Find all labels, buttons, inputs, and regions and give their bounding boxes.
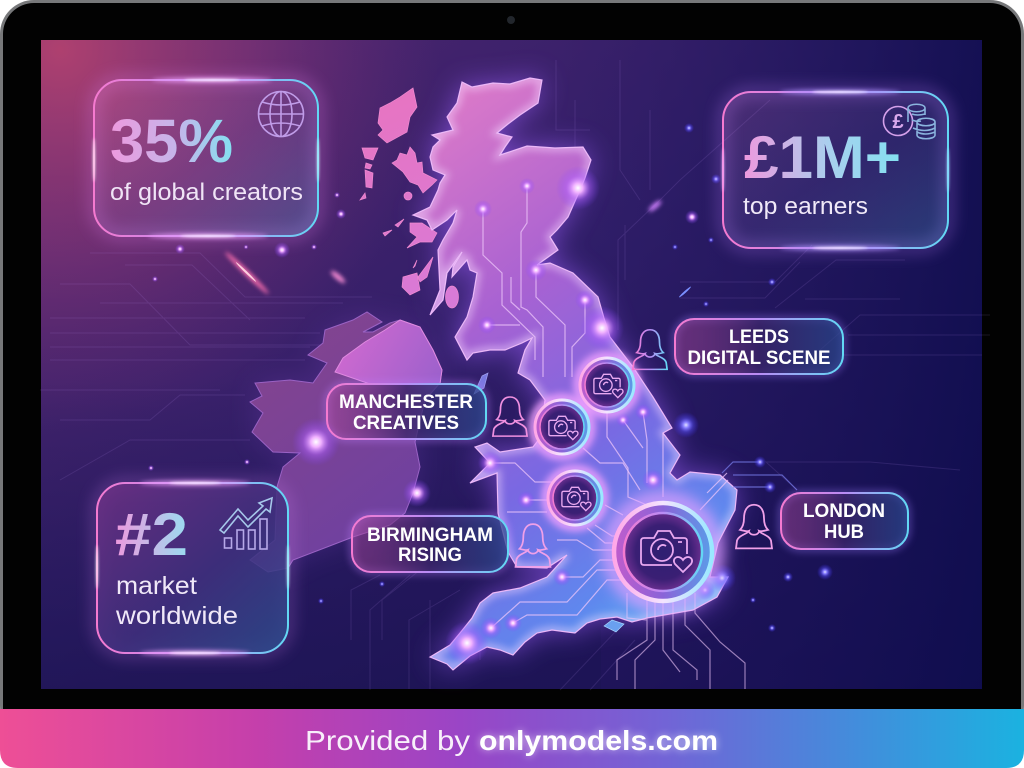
icon: coins: [884, 104, 935, 139]
Northern Ireland: [335, 320, 442, 384]
map: glow: [250, 78, 737, 670]
Isle of Wight: [604, 620, 624, 632]
label: Leeds Digital Scene: [675, 319, 843, 374]
city badge: Manchester: [533, 398, 591, 456]
stat card: 35% of global creators: [93, 77, 319, 239]
camera icon: [641, 531, 692, 572]
screen background: [41, 40, 982, 689]
caption: market: [116, 572, 197, 600]
footer banner: [0, 709, 1024, 768]
background circuit traces: [40, 60, 990, 690]
city badge: Birmingham: [546, 469, 604, 527]
icon: coins: £: [892, 111, 904, 133]
stat card: #2 market worldwide: [96, 480, 289, 656]
label: Birmingham Rising: [352, 516, 508, 572]
caption: top earners: [743, 193, 868, 220]
map circuit lines: [483, 186, 797, 689]
stat card: #2 market worldwide: worldwide: [115, 602, 238, 630]
icon: person Leeds: [633, 330, 667, 369]
label: Manchester Creatives: [327, 384, 486, 439]
value: #2: [115, 501, 188, 568]
background particles: [148, 123, 833, 632]
icon: rising bar chart: [220, 498, 272, 549]
map: Great Britain: [413, 78, 737, 670]
footer banner: onlymodels.com: [479, 725, 718, 756]
value: £1M+: [744, 124, 901, 191]
label: Manchester Creatives: MANCHESTER: [339, 392, 473, 413]
camera icon: [549, 416, 578, 440]
value: 35%: [110, 107, 233, 175]
map glow points: [292, 166, 776, 665]
footer banner: onlymodels.com: [479, 725, 718, 756]
rim light: [413, 78, 737, 670]
icon: globe: [258, 92, 304, 136]
label: Manchester Creatives: CREATIVES: [353, 413, 459, 434]
map: Ireland: [250, 312, 442, 572]
caption: of global creators: [110, 179, 303, 206]
Isle of Man: [474, 373, 488, 394]
label: Birmingham Rising: BIRMINGHAM: [367, 525, 493, 546]
label: London Hub: LONDON: [803, 501, 885, 522]
icon: person Manchester: [493, 397, 527, 436]
city badge: Leeds: [578, 356, 636, 414]
label: Birmingham Rising: RISING: [398, 545, 462, 566]
city badge: London: [611, 500, 715, 604]
map: Scottish islands: [360, 88, 458, 308]
webcam: [507, 16, 515, 24]
footer banner: Provided by: [305, 725, 470, 756]
label: London Hub: HUB: [824, 522, 864, 543]
icon: person London: [736, 505, 772, 548]
camera icon: [594, 374, 623, 398]
camera icon: [562, 487, 591, 511]
label: London Hub: [781, 493, 908, 549]
label: Leeds Digital Scene: DIGITAL SCENE: [688, 348, 830, 369]
label: Leeds Digital Scene: LEEDS: [729, 327, 789, 348]
comet streaks: [224, 199, 692, 298]
stat card: £1M+ top earners: [722, 89, 949, 251]
icon: person Birmingham: [516, 524, 550, 567]
